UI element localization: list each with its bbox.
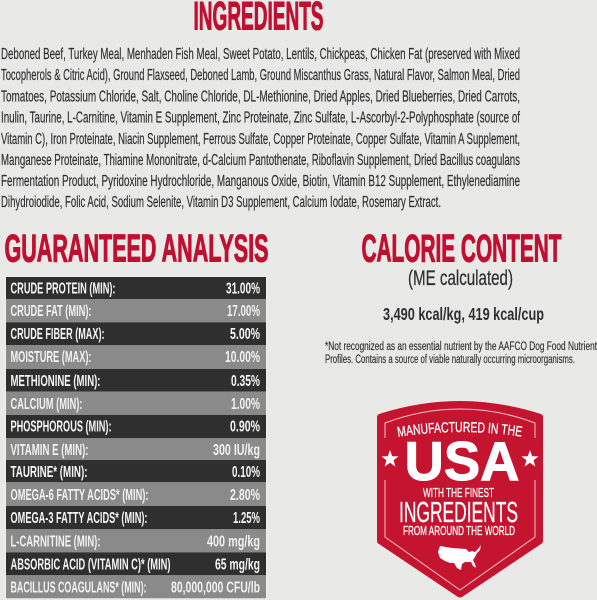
row: omega-6 bbox=[6, 482, 266, 506]
subheading: me calculated: (ME calculated) bbox=[408, 267, 513, 290]
row: omega-6: OMEGA-6 FATTY ACIDS* (MIN): bbox=[10, 487, 148, 504]
badge usa: USA bbox=[404, 430, 520, 492]
row: l-carnitine: 400 mg/kg bbox=[207, 534, 260, 550]
icon: us map bbox=[438, 545, 481, 570]
row: crude fiber: CRUDE FIBER (MAX): bbox=[10, 326, 104, 343]
row: calcium: CALCIUM (MIN): bbox=[10, 396, 82, 413]
row: crude fiber bbox=[6, 322, 266, 345]
badge: manufactured in the usa bbox=[377, 401, 543, 598]
row: crude fat: 17.00% bbox=[227, 303, 260, 320]
row: moisture: MOISTURE (MAX): bbox=[10, 349, 92, 366]
badge line: with the finest: WITH THE FINEST bbox=[423, 486, 494, 500]
row: moisture: 10.00% bbox=[225, 349, 260, 366]
row: methionine bbox=[6, 369, 266, 392]
badge top line bbox=[398, 432, 524, 437]
badge line: from around the world: FROM AROUND THE WORLD bbox=[403, 524, 515, 538]
row: crude fat bbox=[6, 299, 266, 322]
row: bacillus coagulans: BACILLUS COAGULANS* (MIN): bbox=[10, 580, 146, 596]
row: vitamin e bbox=[6, 438, 266, 460]
row: phosphorous: PHOSPHOROUS (MIN): bbox=[10, 418, 111, 436]
row: omega-3: 1.25% bbox=[233, 510, 260, 527]
row: methionine: 0.35% bbox=[231, 373, 260, 390]
row: taurine: TAURINE* (MIN): bbox=[10, 464, 88, 481]
row: bacillus coagulans: 80,000,000 CFU/lb bbox=[171, 580, 260, 596]
row: absorbic acid: ABSORBIC ACID (VITAMIN C)* (MIN) bbox=[10, 556, 170, 574]
row: omega-3 bbox=[6, 506, 266, 529]
row: l-carnitine: L-CARNITINE (MIN): bbox=[10, 534, 100, 550]
row: moisture bbox=[6, 345, 266, 369]
inner outline bbox=[385, 409, 535, 590]
row: omega-3: OMEGA-3 FATTY ACIDS* (MIN): bbox=[10, 510, 148, 527]
row: methionine: METHIONINE (MIN): bbox=[10, 373, 100, 390]
badge line: ingredients: INGREDIENTS bbox=[399, 497, 518, 529]
shield bbox=[377, 401, 543, 598]
row: phosphorous: 0.90% bbox=[230, 418, 260, 436]
row: absorbic acid: 65 mg/kg bbox=[215, 556, 260, 574]
row: taurine bbox=[6, 460, 266, 482]
badge: manufactured in the usa: MANUFACTURED IN THE bbox=[397, 422, 522, 437]
table: guaranteed analysis bbox=[5, 276, 267, 599]
row: crude fat: CRUDE FAT (MIN): bbox=[10, 303, 92, 320]
row: taurine: 0.10% bbox=[232, 464, 260, 481]
row: bacillus coagulans bbox=[6, 575, 266, 598]
row: omega-6: 2.80% bbox=[230, 487, 260, 504]
row: calcium bbox=[6, 392, 266, 415]
row: vitamin e: 300 IU/kg bbox=[213, 442, 260, 459]
row: crude fiber: 5.00% bbox=[230, 326, 260, 343]
row: phosphorous bbox=[6, 415, 266, 438]
star left bbox=[381, 450, 399, 467]
row: crude protein: 31.00% bbox=[226, 280, 260, 298]
star right bbox=[521, 450, 539, 467]
row: vitamin e: VITAMIN E (MIN): bbox=[10, 442, 88, 459]
heading: guaranteed analysis: GUARANTEED ANALYSIS bbox=[4, 228, 268, 270]
footnote bbox=[325, 341, 597, 366]
row: crude protein: CRUDE PROTEIN (MIN): bbox=[10, 280, 116, 298]
row: calcium: 1.00% bbox=[231, 396, 260, 413]
row: l-carnitine bbox=[6, 529, 266, 552]
text block: ingredients list bbox=[1, 46, 520, 211]
row: crude protein bbox=[6, 277, 266, 299]
